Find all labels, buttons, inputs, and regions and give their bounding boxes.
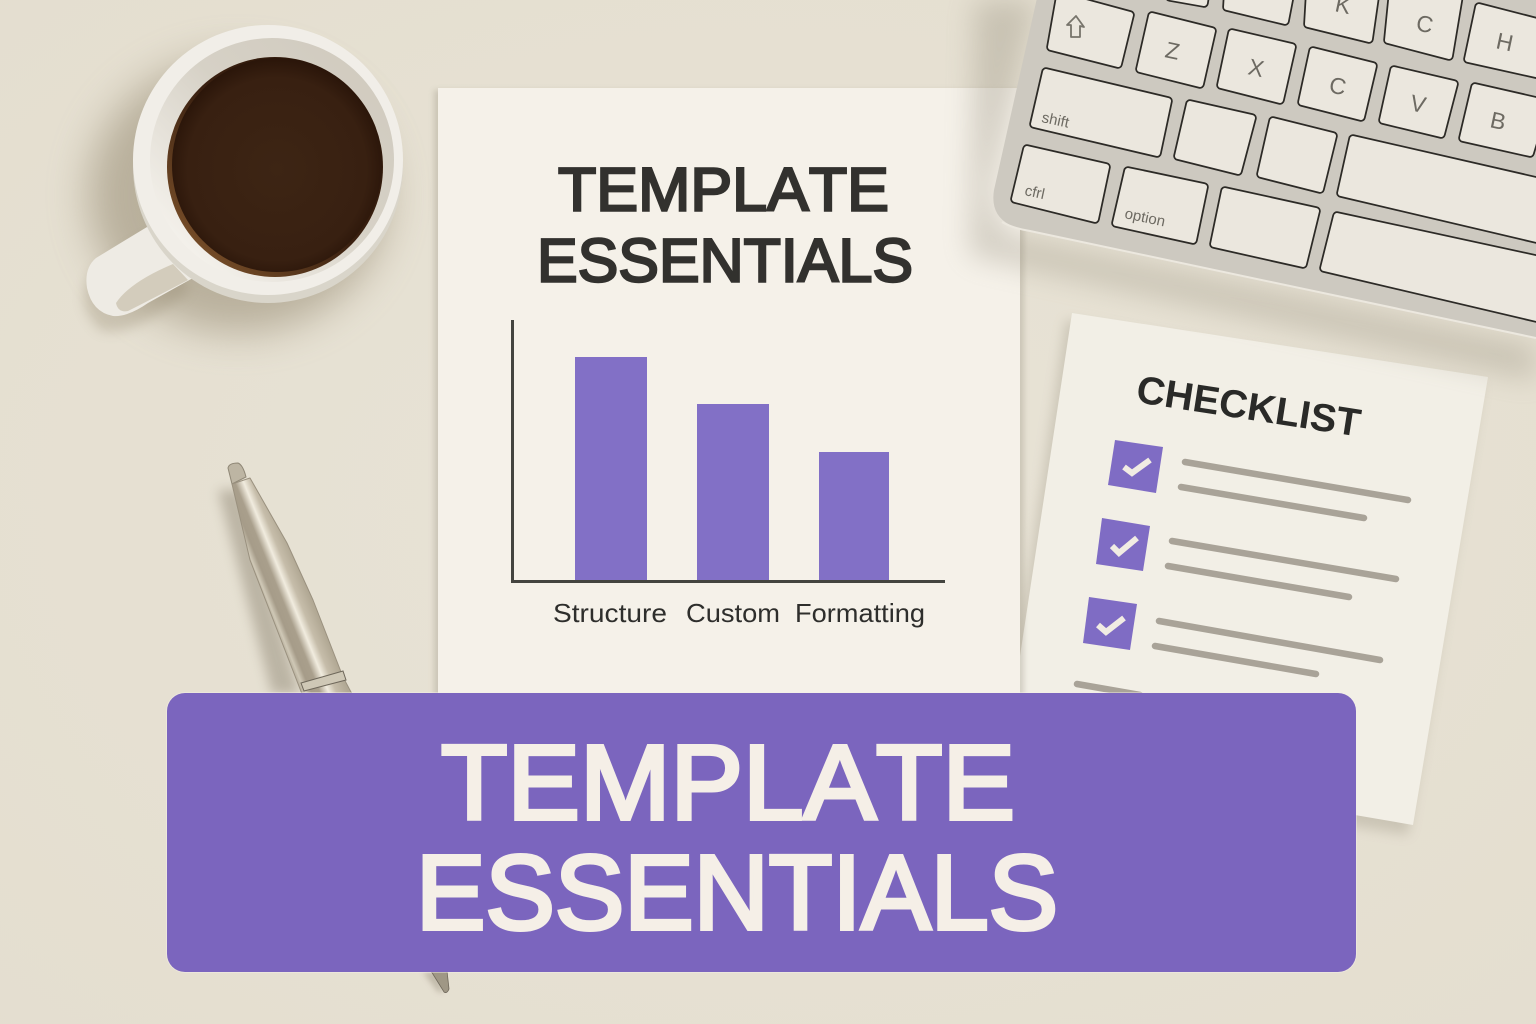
- key labels: B: [1488, 106, 1508, 135]
- document title: [537, 156, 913, 294]
- checklist item 4 partial line: [1077, 684, 1140, 695]
- document title: TEMPLATE: [558, 156, 889, 224]
- keyboard: [970, 0, 1536, 380]
- purple banner: [166, 692, 1357, 973]
- pen end below banner: [423, 971, 449, 993]
- checklist item 2: [1096, 518, 1396, 597]
- coffee: [167, 57, 383, 277]
- key labels: cfrl: [1023, 182, 1046, 203]
- key labels: shift: [1040, 109, 1071, 132]
- bar labels: Custom: [686, 598, 780, 628]
- banner title: ESSENTIALS: [416, 834, 1058, 952]
- document title: ESSENTIALS: [537, 226, 913, 294]
- coffee cup: [84, 25, 403, 333]
- bar labels: Formatting: [795, 598, 925, 628]
- key labels: H: [1494, 27, 1516, 56]
- cup inner wall: [150, 38, 394, 282]
- pen tip: [228, 463, 246, 484]
- checklist sheet: [1000, 313, 1488, 835]
- bar: custom: [697, 404, 769, 580]
- keys: [1015, 0, 1536, 320]
- bar chart: [512, 320, 945, 628]
- checklist heading: CHECKLIST: [1134, 368, 1364, 445]
- bar: structure: [575, 357, 647, 580]
- banner title: [416, 724, 1058, 952]
- pen: [218, 463, 352, 694]
- bar labels: [553, 598, 925, 628]
- pen shadow: [218, 490, 300, 694]
- pen barrel: [232, 478, 352, 694]
- key labels: C: [1327, 71, 1349, 100]
- keyboard body: [993, 0, 1536, 338]
- key labels: C: [1414, 9, 1436, 38]
- key labels: [1023, 0, 1516, 230]
- key labels: V: [1408, 89, 1429, 118]
- key labels: Z: [1163, 36, 1182, 65]
- cup handle: [84, 227, 193, 332]
- bar labels: Structure: [553, 598, 667, 628]
- key labels: X: [1246, 53, 1266, 82]
- chart axes: [512, 320, 945, 582]
- checklist item 3: [1083, 597, 1380, 674]
- main document sheet: [434, 88, 1024, 700]
- pen ring: [301, 671, 346, 691]
- key labels: option: [1123, 205, 1167, 230]
- bar: formatting: [819, 452, 889, 580]
- cup shadow: [88, 57, 388, 333]
- checklist item 1: [1108, 440, 1408, 518]
- cup rim: [133, 29, 403, 303]
- banner title: TEMPLATE: [441, 724, 1015, 842]
- icon: shift arrow: [1067, 16, 1084, 37]
